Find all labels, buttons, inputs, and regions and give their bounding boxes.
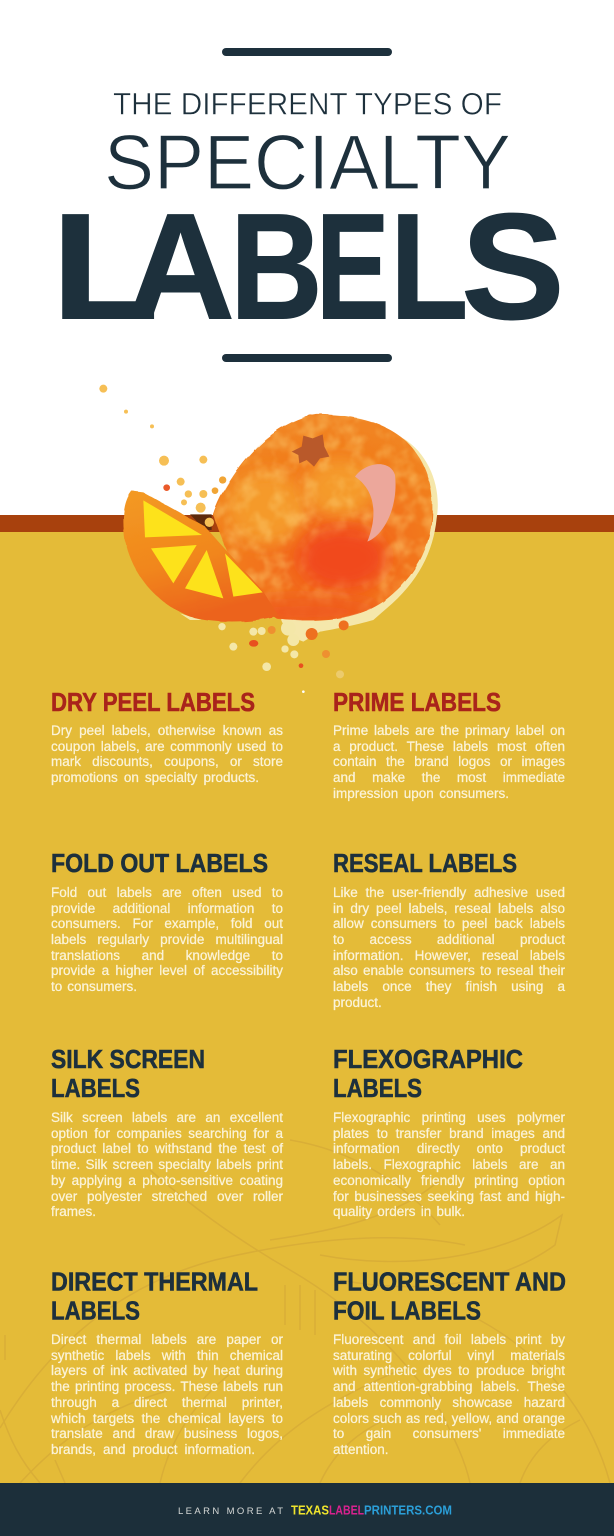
juice droplets: [99, 385, 226, 527]
text block: information. However, reseal labels: [333, 948, 565, 963]
heading: DIRECT THERMAL: [51, 1266, 258, 1296]
text block: contain the brand logos or images: [333, 754, 565, 769]
heading: DRY PEEL LABELS: [51, 687, 255, 717]
footer call to action: LEARN MORE AT: [178, 1506, 283, 1517]
text block: consumers. For example, fold out: [51, 916, 283, 931]
text block: allow consumers to peel back labels: [333, 916, 565, 931]
highlight: [355, 464, 396, 542]
stem scar: [292, 434, 329, 467]
panel: prime labels: [333, 687, 565, 802]
text block: and make the most immediate: [333, 770, 565, 785]
text block: impression upon consumers.: [333, 786, 509, 801]
text block: Fold out labels are often used to: [51, 885, 283, 900]
text block: by applying a photo-sensitive coating: [51, 1173, 283, 1188]
panel: direct thermal labels: [50, 1266, 283, 1458]
text block: a product. These labels most often: [333, 739, 565, 754]
text block: [51, 1110, 284, 1219]
heading: FOIL LABELS: [333, 1296, 481, 1326]
text block: Like the user-friendly adhesive used: [333, 885, 565, 900]
text block: [51, 885, 284, 994]
text block: quality orders in bulk.: [333, 1204, 465, 1219]
text block: saturating colorful vinyl materials: [333, 1348, 565, 1363]
text block: to gain consumers' immediate: [333, 1426, 565, 1441]
heading: [333, 1044, 523, 1103]
text block: brands, and product information.: [51, 1442, 255, 1457]
title: [51, 86, 565, 330]
text block: labels regularly provide multilingual: [51, 932, 283, 947]
text block: Direct thermal labels are paper or: [51, 1332, 283, 1347]
text block: [51, 723, 283, 786]
text block: time. Silk screen specialty labels print: [51, 1157, 283, 1172]
title: THE DIFFERENT TYPES OF: [113, 86, 502, 122]
top rule: [222, 48, 392, 56]
text block: frames.: [51, 1204, 96, 1219]
heading: LABELS: [51, 1073, 140, 1103]
illustration: watercolor orange with slice: [99, 384, 438, 693]
text block: labels once they finish using a: [333, 979, 565, 994]
panel: fold out labels: [51, 848, 284, 994]
text block: labels commonly showcase hazard: [333, 1395, 565, 1410]
heading: FLUORESCENT AND: [333, 1266, 566, 1296]
text block: provide a higher level of accessibility: [51, 963, 283, 978]
text block: provide additional information to: [51, 901, 283, 916]
text block: colors such as red, yellow, and orange: [333, 1411, 565, 1426]
text block: through a direct thermal printer,: [51, 1395, 283, 1410]
text block: synthetic labels with thin chemical: [51, 1348, 283, 1363]
text block: Silk screen labels are an excellent: [51, 1110, 283, 1125]
heading: RESEAL LABELS: [333, 848, 517, 878]
text block: Dry peel labels, otherwise known as: [51, 723, 283, 738]
heading: PRIME LABELS: [333, 687, 501, 717]
text block: [333, 723, 565, 802]
text block: to consumers.: [51, 979, 137, 994]
heading: FOLD OUT LABELS: [51, 848, 268, 878]
text block: which targets the chemical layers to: [51, 1411, 283, 1426]
text block: with synthetic dyes to produce bright: [333, 1363, 565, 1378]
text block: economically friendly printing option: [333, 1173, 565, 1188]
heading: LABELS: [51, 1296, 140, 1326]
text block: labels. Flexographic labels are an: [333, 1157, 565, 1172]
text block: [333, 885, 566, 1010]
text block: the printing process. These labels run: [51, 1379, 283, 1394]
heading: [51, 1266, 258, 1326]
text block: [50, 1332, 283, 1458]
panel: dry peel labels: [51, 687, 283, 786]
yellow background panel: [0, 532, 614, 1483]
panel: flexographic labels: [333, 1044, 566, 1220]
text block: [332, 1332, 566, 1457]
text block: coupon labels, are commonly used to: [51, 739, 283, 754]
footer bar: [0, 1483, 614, 1536]
footer call to action: [178, 1504, 452, 1518]
text block: promotions on specialty products.: [51, 770, 259, 785]
watermark: orange line drawing: [0, 1140, 610, 1483]
text block: information directly onto product: [333, 1141, 565, 1156]
text block: over polyester stretched over roller: [51, 1189, 283, 1204]
text block: translate and draw business logos,: [51, 1426, 283, 1441]
text block: mark discounts, coupons, or store: [51, 754, 283, 769]
text block: attention.: [333, 1442, 389, 1457]
heading: [333, 1266, 566, 1326]
heading: LABELS: [333, 1073, 422, 1103]
text block: in dry peel labels, reseal labels also: [333, 901, 565, 916]
footer call to action: PRINTERS.COM: [364, 1504, 452, 1518]
cream wash behind orange: [180, 438, 438, 642]
text block: to access additional product: [333, 932, 565, 947]
text block: [333, 1110, 566, 1220]
text block: product label to withstand the test of: [51, 1141, 283, 1156]
text block: translations and knowledge to: [51, 948, 283, 963]
text block: Flexographic printing uses polymer: [333, 1110, 565, 1125]
text block: and attention-grabbing labels. These: [333, 1379, 565, 1394]
text block: layers of ink activated by heat during: [51, 1363, 283, 1378]
text block: plates to transfer brand images and: [333, 1126, 565, 1141]
text block: also enable consumers to reseal their: [333, 963, 565, 978]
title: SPECIALTY: [104, 118, 511, 206]
footer call to action: TEXAS: [291, 1504, 329, 1518]
body mottling: [210, 412, 437, 625]
heading: FLEXOGRAPHIC: [333, 1044, 523, 1074]
panel: fluorescent and foil labels: [332, 1266, 566, 1457]
orange body: [213, 414, 432, 620]
panel: reseal labels: [333, 848, 566, 1010]
text block: Fluorescent and foil labels print by: [333, 1332, 565, 1347]
heading: SILK SCREEN: [51, 1044, 205, 1074]
slice rind: [123, 491, 278, 622]
text block: for businesses seeking fast and high-: [333, 1189, 565, 1204]
brown band: [0, 515, 614, 532]
footer call to action: LABEL: [329, 1504, 364, 1518]
slice segments: [143, 500, 263, 598]
dark patch on band: [190, 514, 212, 530]
panel: silk screen labels: [51, 1044, 284, 1219]
heading: [51, 1044, 205, 1103]
text block: option for companies searching for a: [51, 1126, 283, 1141]
text block: product.: [333, 995, 382, 1010]
bottom rule: [222, 354, 392, 362]
text block: Prime labels are the primary label on: [333, 723, 565, 738]
